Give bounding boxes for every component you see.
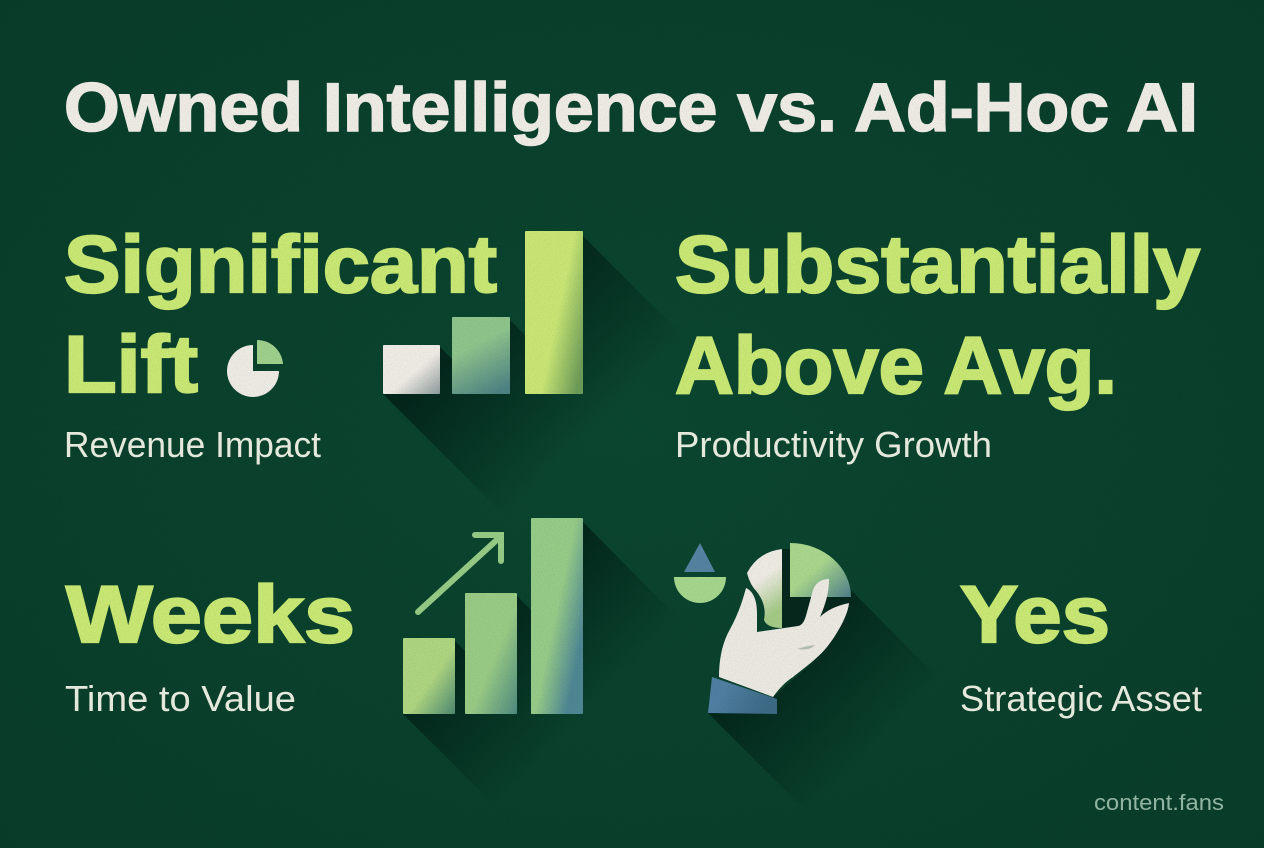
icon: hand [719, 579, 849, 697]
icon: pie chart [227, 340, 283, 397]
icon: pie pieces [747, 543, 851, 628]
icon: growth arrow [418, 535, 501, 612]
heading: substantially above avg: Above Avg. [675, 321, 1117, 411]
panel: time to value [65, 518, 680, 805]
label: productivity growth: Productivity Growth [675, 424, 992, 465]
hand shadow [708, 590, 940, 812]
heading: significant lift: Lift [64, 320, 198, 410]
panel: productivity growth [675, 220, 1200, 465]
growth chart shadow [403, 522, 680, 805]
label: strategic asset: Strategic Asset [960, 678, 1202, 719]
growth bar chart [403, 518, 583, 714]
heading: substantially above avg: Substantially [675, 220, 1200, 310]
icon: shirt cuff [708, 677, 777, 714]
panel: strategic asset [674, 543, 1202, 812]
heading: yes: Yes [960, 570, 1110, 660]
bar chart shadow [383, 236, 683, 515]
heading: significant lift: Significant [64, 220, 497, 310]
heading: weeks: Weeks [66, 570, 355, 660]
label: revenue impact: Revenue Impact [64, 424, 321, 465]
title: Owned Intelligence vs. Ad-Hoc AI [64, 69, 1198, 146]
icon: balance shapes [674, 543, 726, 603]
bar chart [383, 231, 583, 394]
panel: revenue impact [64, 220, 683, 515]
pie gap shadow [757, 549, 851, 640]
label: time to value: Time to Value [65, 678, 296, 719]
source credit: content.fans [1094, 790, 1224, 815]
